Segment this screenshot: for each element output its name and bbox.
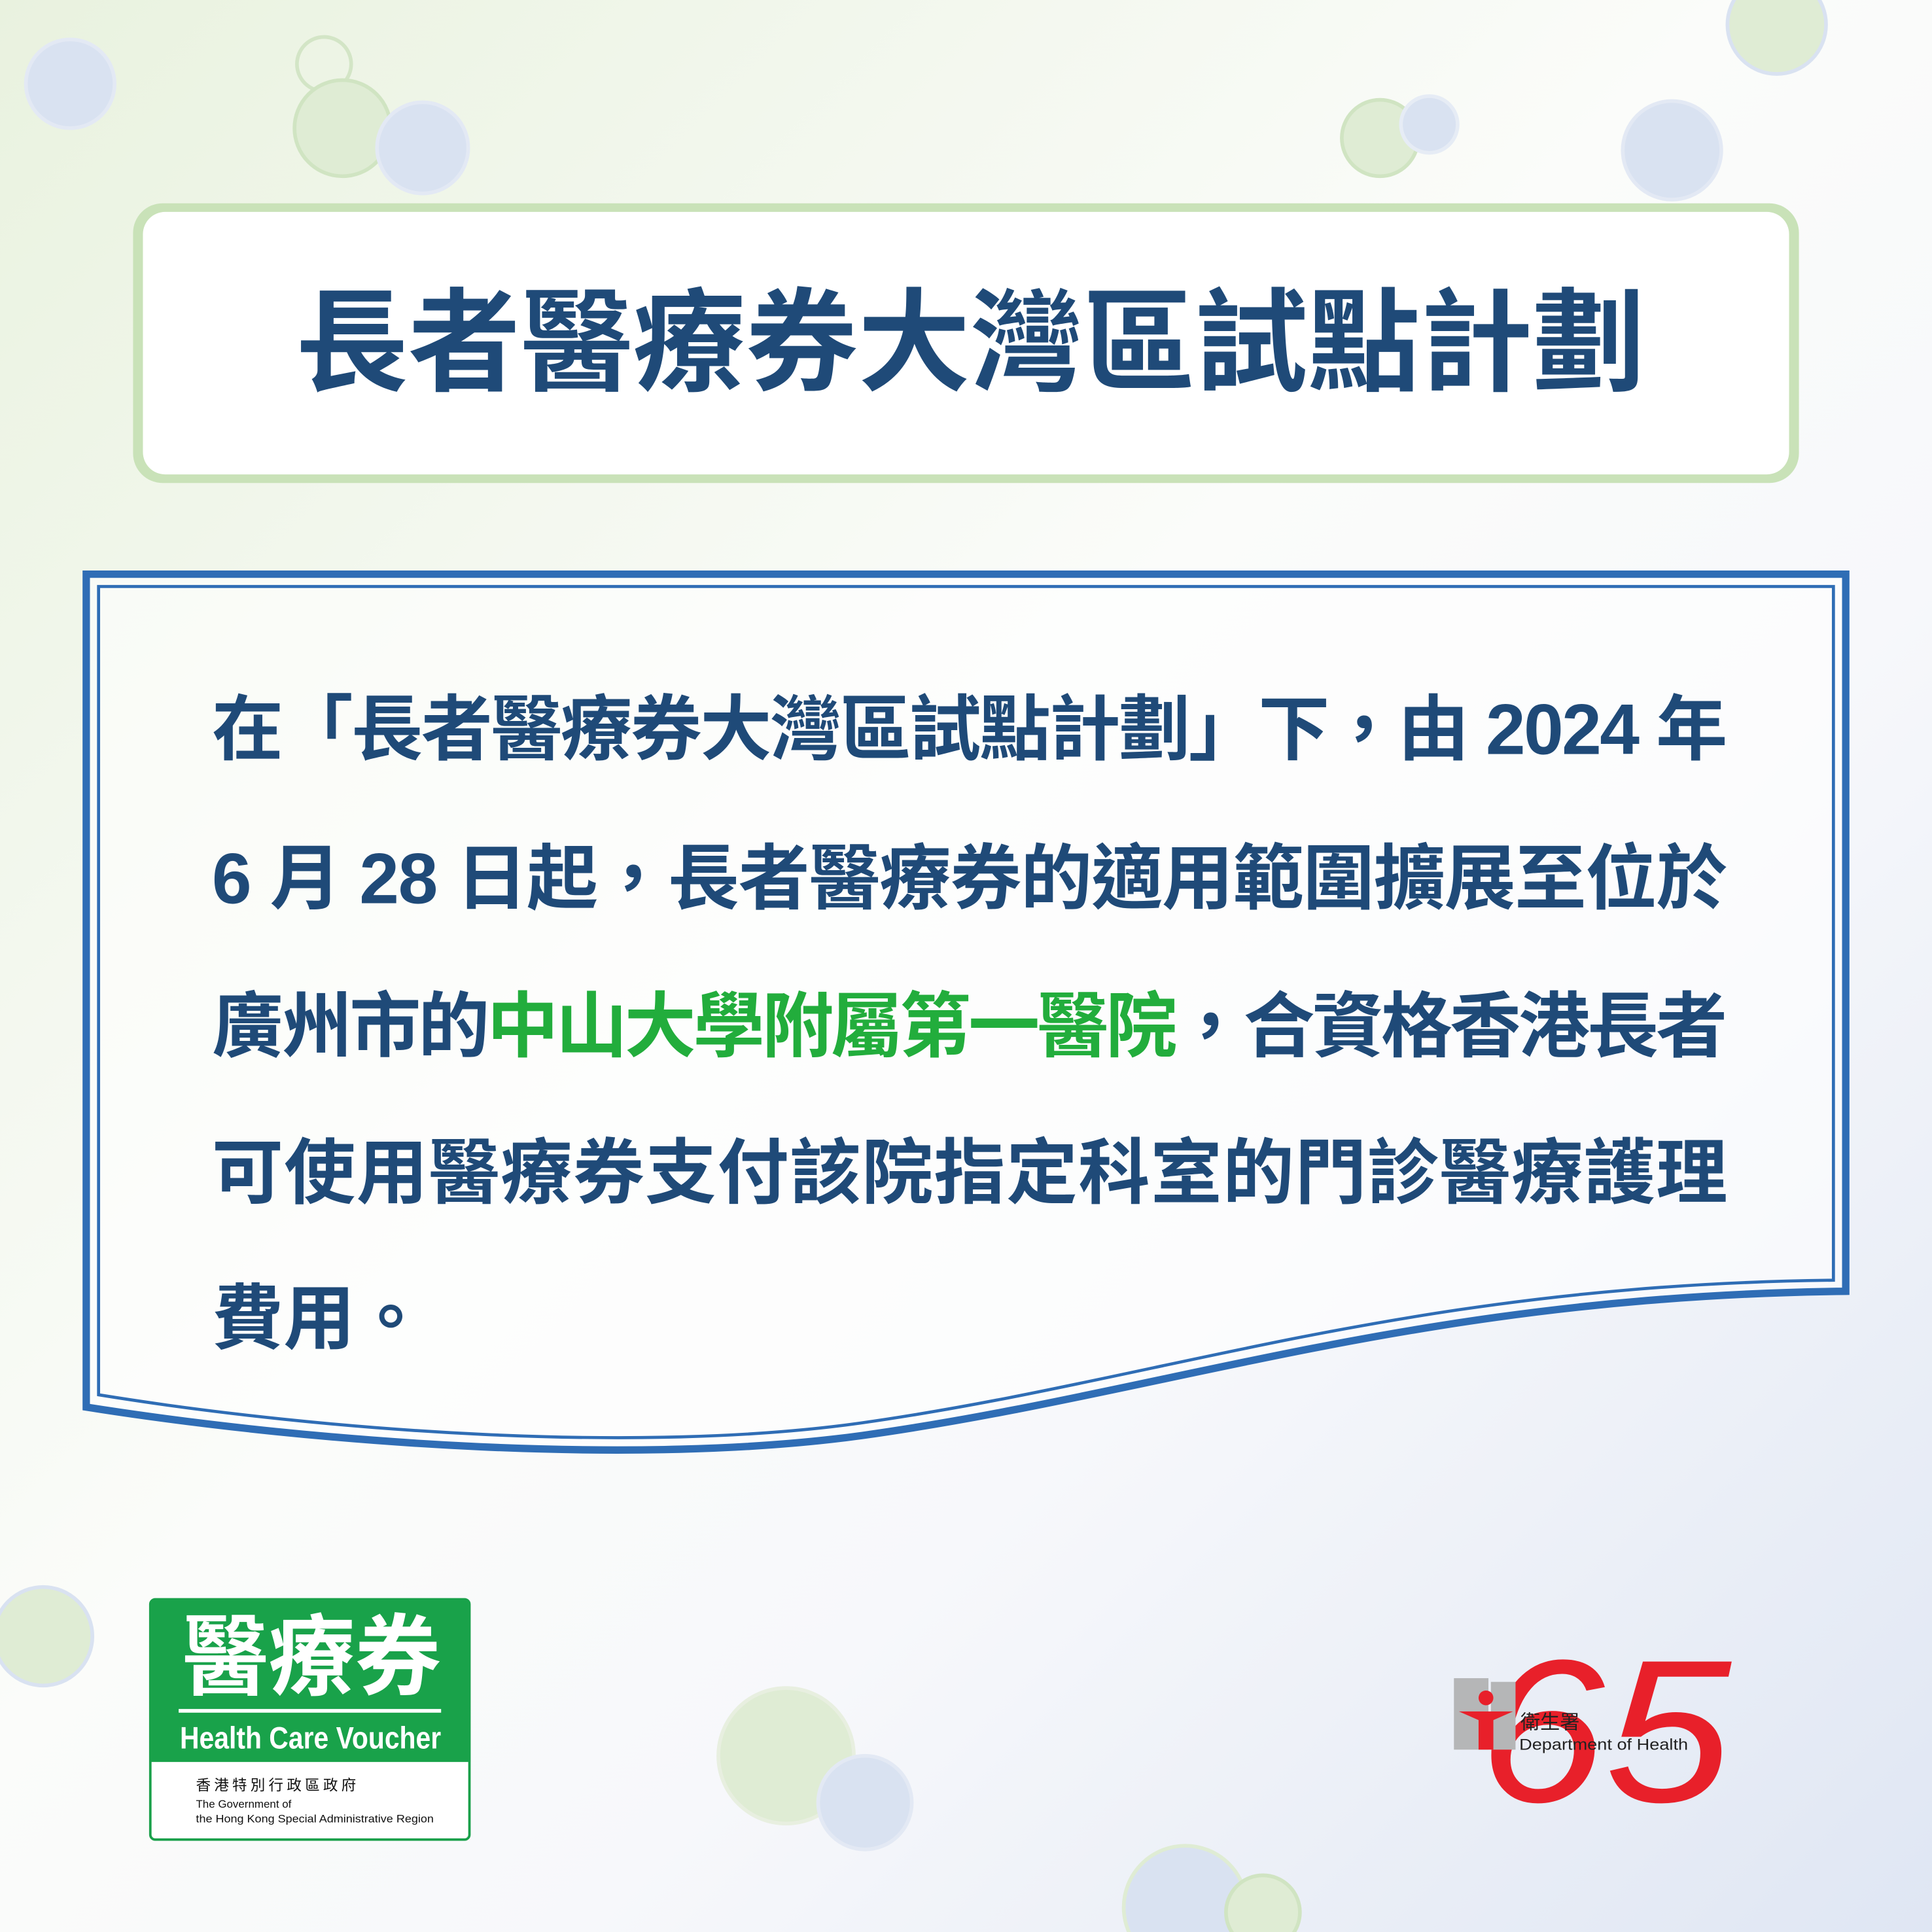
body text: 廣州市的中山大學附屬第一醫院，合資格香港長者 [212,987,1727,1066]
logo: Department of Health 65: 65 [1479,1617,1732,1844]
body text: 可使用醫療券支付該院指定科室的門診醫療護理 [212,1134,1727,1214]
body text [212,690,1727,1359]
logo: Department of Health 65: 衛生署 [1520,1711,1579,1733]
main panel [86,574,1846,1450]
body text: 在「長者醫療券大灣區試點計劃」下，由 2024 年 [212,690,1727,770]
logo: Health Care Voucher: Health Care Voucher [180,1720,441,1755]
logo: Health Care Voucher: the Hong Kong Special Administrative Region [196,1812,434,1825]
body text: 費用。 [212,1279,427,1359]
logo: Health Care Voucher [150,1600,470,1840]
logo: Health Care Voucher: 醫療券 [183,1607,441,1707]
logo: Department of Health 65: Department of Health [1519,1736,1688,1753]
logo: Health Care Voucher: 香港特別行政區政府 [196,1777,356,1793]
body text: 6 月 28 日起，長者醫療券的適用範圍擴展至位於 [212,839,1727,919]
title box [133,203,1799,483]
title: 長者醫療券大灣區試點計劃 [296,281,1645,406]
logo: Health Care Voucher: The Government of [196,1798,292,1810]
